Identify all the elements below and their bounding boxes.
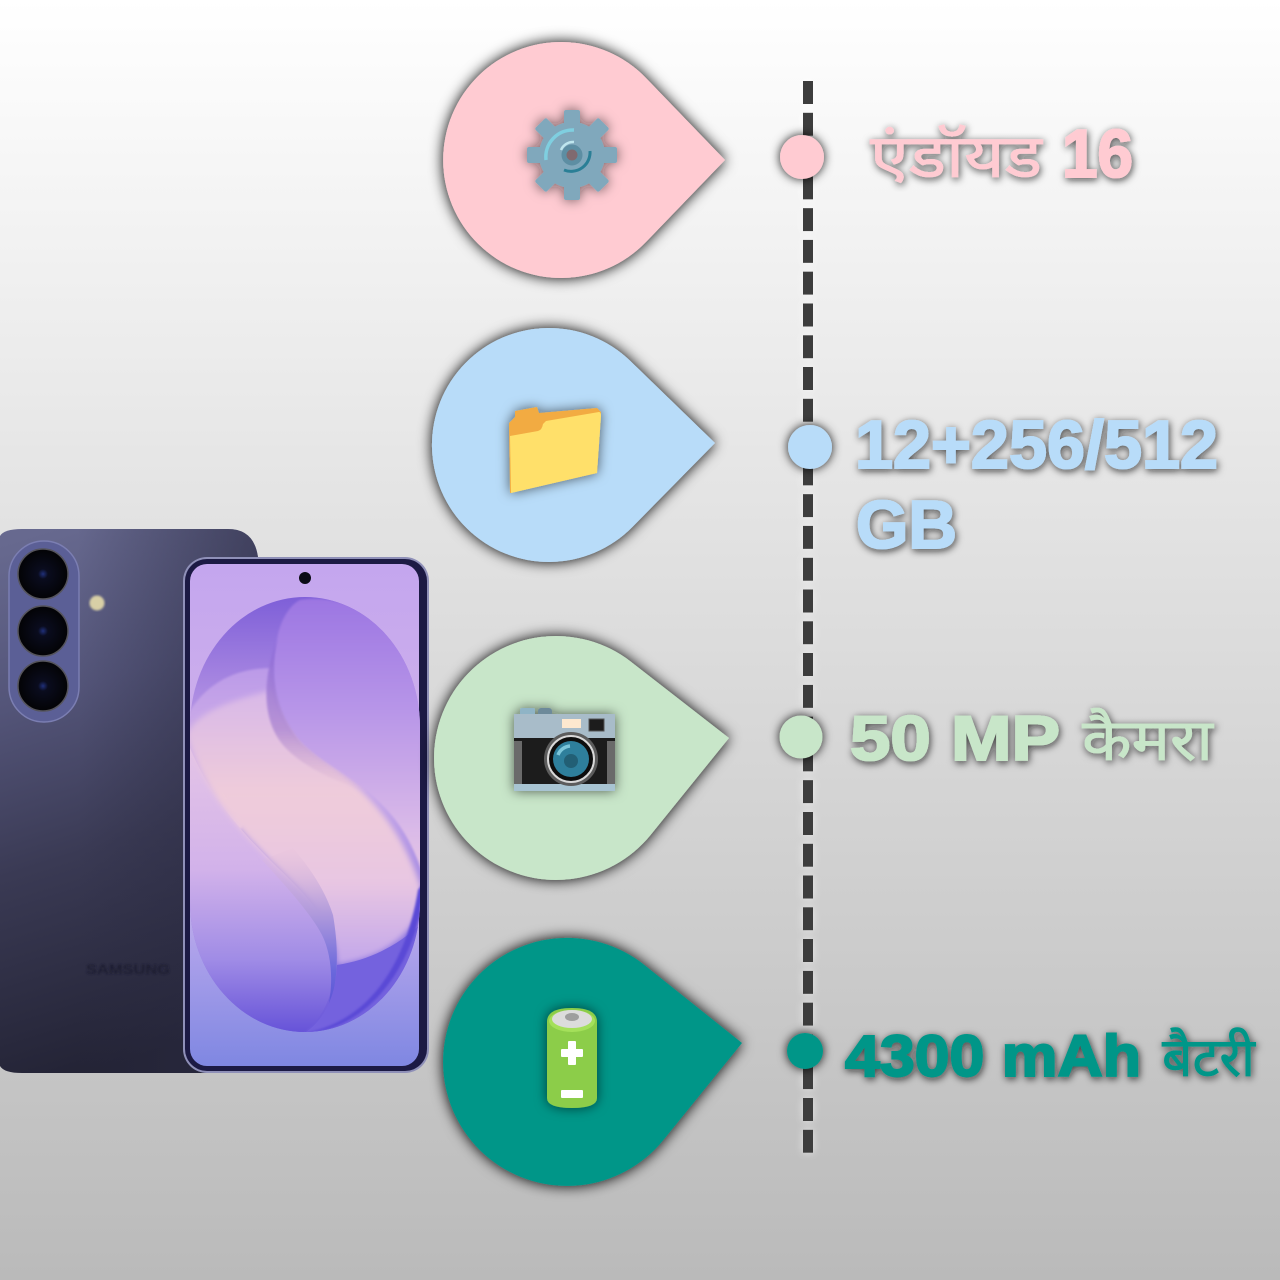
green drop xyxy=(434,636,729,880)
connector dot xyxy=(787,1033,823,1069)
label: 50 MP xyxy=(850,704,1060,774)
label xyxy=(855,407,1218,563)
label xyxy=(870,116,1133,192)
icon: camera xyxy=(514,708,615,791)
label: एंडॉयड xyxy=(870,123,1043,190)
label: 16 xyxy=(1062,116,1133,192)
label: 12+256/512 xyxy=(855,407,1218,483)
icon: folder xyxy=(509,407,601,493)
screen wallpaper xyxy=(185,564,425,1066)
connector dot xyxy=(788,425,832,469)
feature: storage xyxy=(432,328,1218,563)
label xyxy=(845,1024,1256,1089)
pink drop xyxy=(443,42,725,278)
phone back xyxy=(0,529,258,1073)
front camera xyxy=(299,572,311,584)
label xyxy=(850,704,1214,774)
feature: camera xyxy=(434,636,1214,880)
icon: gear xyxy=(527,110,617,200)
teal drop xyxy=(443,938,742,1186)
feature: android xyxy=(443,42,1133,278)
phone illustration xyxy=(0,529,429,1073)
feature: battery xyxy=(443,938,1256,1186)
phone front xyxy=(183,557,429,1073)
connector dot xyxy=(780,135,824,179)
brand name: SAMSUNG xyxy=(86,961,170,977)
connector dot xyxy=(780,716,822,758)
label: 4300 mAh xyxy=(845,1024,1141,1089)
dashed timeline xyxy=(803,81,813,1154)
label: बैटरी xyxy=(1162,1027,1256,1088)
flash xyxy=(90,596,104,610)
label: GB xyxy=(856,487,957,563)
icon: battery xyxy=(547,1008,597,1108)
camera module xyxy=(9,541,79,722)
blue drop xyxy=(432,328,715,562)
label: कैमरा xyxy=(1082,708,1214,773)
